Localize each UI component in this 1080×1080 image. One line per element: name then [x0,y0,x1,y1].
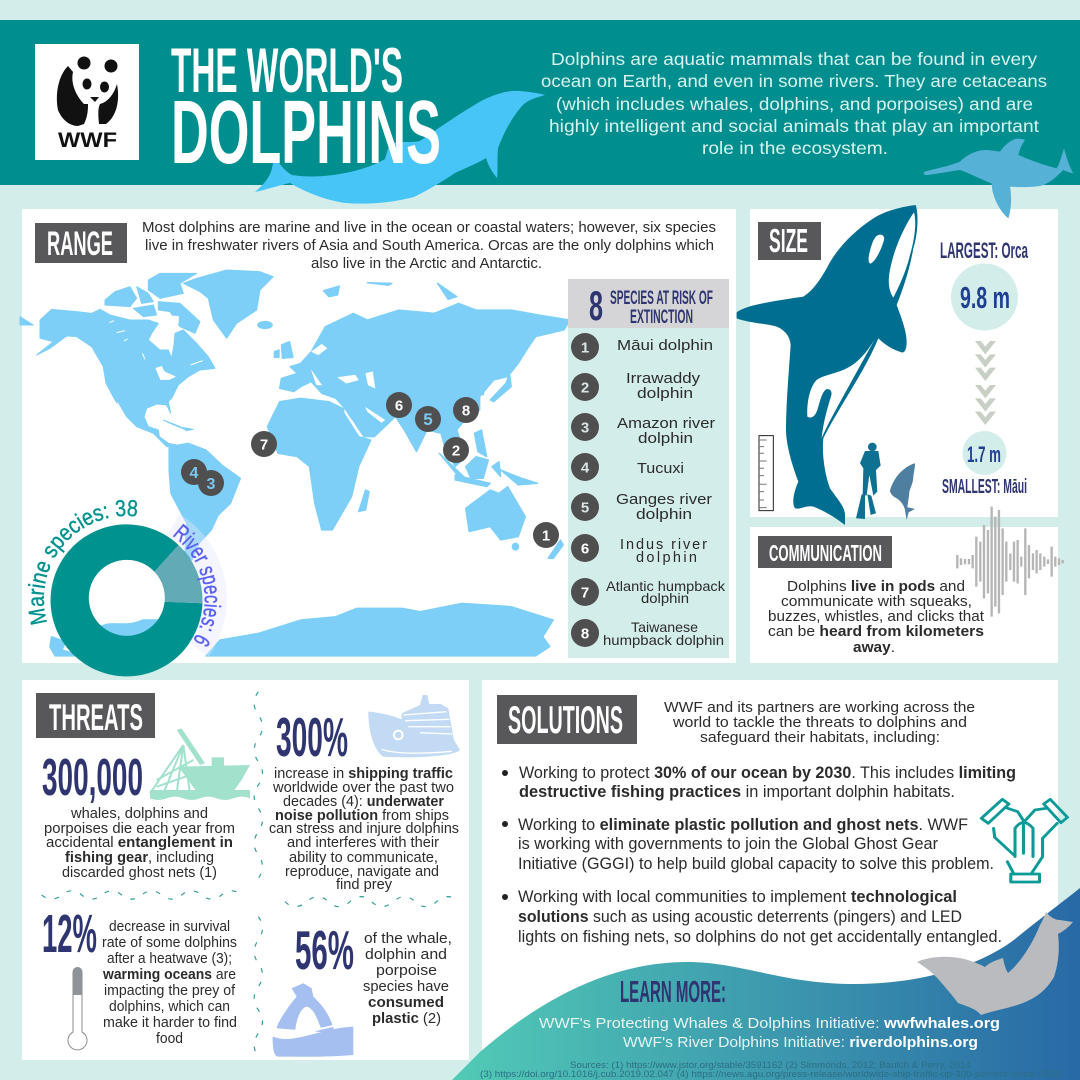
icon: blue dolphin in header [255,91,545,204]
donut chart: marine vs river species: Marine species: 38 [28,500,138,625]
threat text: warming: after a heatwave (3); [107,951,232,967]
bullet: ocean protection [502,764,1016,801]
threat text: plastic: of the whale, [364,931,452,947]
icon: joined hands [981,799,1067,882]
threat text: warming: impacting the prey of [104,983,236,999]
intro text: role in the ecosystem. [702,138,888,158]
text: LEARN MORE: [620,974,726,1009]
bullet: ocean protection: Working to protect 30% of our ocean by 2030. This includes limiting [519,764,1016,782]
panel: species at risk list: Taiwanese [631,619,698,635]
sources: (3) https://doi.org/10.1016/j.cub.2019.02.047 (4) https://news.agu.org/press-release/worldwide-ship-traffic-up-300-percent-since-1992/ [480,1069,1062,1080]
heading: threats [36,693,155,738]
threat text: shipping [269,766,459,893]
panel: species at risk list: Māui dolphin [617,338,713,354]
threat text: shipping: reproduce, navigate and [285,864,439,880]
panel: species at risk list: Tucuxi [637,461,684,477]
icon: thermometer [68,968,87,1050]
panel: species at risk list: EXTINCTION [630,306,693,328]
intro text: highly intelligent and social animals that play an important [549,116,1039,136]
intro text: ocean on Earth, and even in some rivers. They are cetaceans [541,71,1047,91]
icon: ruler [759,436,773,511]
range text: live in freshwater rivers of Asia and South America. Orcas are the only dolphins which [145,238,714,254]
logo: WWF panda: WWF [58,129,117,152]
learn more links: WWF's River Dolphins Initiative: riverdolphins.org [623,1034,978,1051]
range text [142,220,716,272]
learn more wave [452,888,1080,1080]
threat text: warming [102,919,237,1047]
threat text: shipping: decades (4): underwater [283,794,444,810]
stat: 300%: 300% [276,706,348,768]
icon: fishing boat [150,728,250,800]
threat text: warming: food [156,1031,183,1047]
title: THE WORLD'S [171,36,403,106]
title: DOLPHINS [171,83,441,183]
threat text: plastic: species have [363,979,449,995]
panel: communication [750,527,1058,663]
threat text: plastic: dolphin and [365,947,447,963]
threat text: entanglement [44,806,235,881]
communication text: away. [853,640,895,656]
panel: species at risk list: 8 [581,626,589,642]
threat text: plastic [363,931,452,1027]
panel: species at risk list: 1 [581,340,589,356]
panel: species at risk list: 8 [589,282,603,329]
panel: species at risk list: Indus river [620,537,707,553]
solutions intro: WWF and its partners are working across the [664,700,975,716]
world map [20,270,570,656]
heading: range [35,223,127,263]
communication text: communicate with squeaks, [781,594,972,610]
1.7 m circle: 1.7 m [967,442,1001,467]
threat text: plastic: porpoise [376,963,437,979]
threat text: warming: make it harder to find [103,1015,237,1031]
wavy dividers [42,692,458,1057]
stat: 12%: 12% [42,904,97,964]
panel: size [750,209,1058,517]
sources [480,1060,1062,1080]
donut chart: marine vs river species [28,500,226,676]
range text: also live in the Arctic and Antarctic. [311,256,542,272]
bullet: technological solutions: solutions such as using acoustic deterrents (pingers) and LED [518,908,962,926]
heading: communication [758,536,892,568]
map markers [181,392,559,548]
panel: species at risk list: dolphin [641,590,689,606]
threat text: entanglement: porpoises die each year from [44,821,235,837]
bullet: plastic and ghost nets [502,816,994,873]
panel: species at risk list: dolphin [638,431,693,447]
heading: size: SIZE [769,222,808,259]
header band [0,20,1080,185]
intro text [541,49,1047,158]
heading: solutions: SOLUTIONS [508,699,623,742]
1.7 m circle [962,431,1006,475]
9.8 m circle [951,264,1018,330]
heading: communication: COMMUNICATION [769,540,882,566]
stat: 300,000: 300,000 [42,749,143,807]
panel: species at risk list: 3 [581,420,589,436]
learn more links: WWF's Protecting Whales & Dolphins Initiative: wwfwhales.org [539,1015,1000,1032]
threat text: plastic: consumed [368,995,444,1011]
threat text: entanglement: whales, dolphins and [70,806,208,822]
9.8 m circle: 9.8 m [960,280,1010,315]
communication text: can be heard from kilometers [768,624,984,640]
panel: species at risk list: humpback dolphin [603,632,724,648]
communication text: buzzes, whistles, and clicks that [768,609,984,625]
threat text: shipping: noise pollution from ships [275,808,449,824]
panel: species at risk list: 7 [581,584,589,602]
map markers: 7 [260,436,268,454]
intro text: (which includes whales, dolphins, and porpoises) and are [556,94,1033,114]
communication text [768,579,984,656]
panel: species at risk list: 4 [581,460,590,476]
learn more links [539,1015,1000,1051]
panel: species at risk list: 2 [581,380,589,396]
donut chart: marine vs river species: River species: 6 [173,524,222,647]
panel: species at risk list: Amazon river [617,416,715,432]
panel: species at risk list: Irrawaddy [626,371,701,387]
heading: solutions [497,695,637,744]
panel: species at risk list: dolphin [636,507,692,523]
threat text: warming: dolphins, which can [109,999,230,1015]
icon: diver [856,443,881,519]
threat text: shipping: increase in shipping traffic [274,766,453,782]
sources: Sources: (1) https://www.jstor.org/stable/3591162 (2) Simmonds, 2012; Baulch & Perry, 2014 [570,1060,971,1071]
bullet: technological solutions: Working with local communities to implement technological [518,888,957,906]
icon: plastic bottle [273,983,353,1057]
panel: species at risk list: Ganges river [616,492,712,508]
threat text: shipping: worldwide over the past two [272,780,454,796]
threat text: warming: decrease in survival [109,919,230,935]
map markers: 8 [462,402,470,420]
icon: orca silhouette [737,205,918,525]
icon: sound wave [957,507,1063,617]
panel: solutions [482,680,1058,1060]
bullet: plastic and ghost nets: is working with governments to join the Global Ghost Gear [518,835,938,853]
heading: threats: THREATS [49,697,143,738]
threat text: warming: warming oceans are [102,967,236,983]
panel: range [22,209,736,663]
intro text: Dolphins are aquatic mammals that can be found in every [551,49,1037,69]
solutions intro [664,700,975,746]
solutions intro: safeguard their habitats, including: [700,730,940,746]
threat text: shipping: find prey [336,877,393,893]
map markers: 6 [395,398,403,414]
threat text: shipping: and interferes with their [287,835,439,851]
map markers: 2 [452,442,460,460]
range text: Most dolphins are marine and live in the ocean or coastal waters; however, six species [142,220,716,236]
panel: species at risk list: 6 [581,540,589,558]
bullet: technological solutions [502,888,1002,946]
panel: species at risk list: dolphin [636,550,697,566]
panel: species at risk list: 5 [581,500,589,516]
icon: ship [368,695,460,757]
icon: pale dolphin at header right [924,139,1073,218]
threat text: entanglement: fishing gear, including [65,850,214,866]
heading: range: RANGE [47,225,113,263]
title [171,36,441,183]
panel: species at risk list [568,279,729,658]
bullet: plastic and ghost nets: Working to eliminate plastic pollution and ghost nets. WWF [518,816,968,834]
icon: grey dolphin [917,912,1073,1015]
threat text: shipping: can stress and injure dolphins [269,821,459,837]
threat text: plastic: plastic (2) [372,1011,441,1027]
panel: threats [22,680,469,1060]
map markers: 1 [542,528,550,544]
map markers: 4 [190,465,199,482]
communication text: Dolphins live in pods and [787,579,965,595]
stat: 56%: 56% [295,919,354,981]
map markers: 5 [423,410,433,429]
panel: species at risk list: dolphin [637,386,693,402]
heading: size [758,222,821,260]
threat text: shipping: ability to communicate, [289,850,438,866]
chevron arrows [975,341,996,425]
panel: species at risk list: SPECIES AT RISK OF [610,287,713,309]
solutions intro: world to tackle the threats to dolphins and [672,715,967,731]
icon: small dolphin [890,463,915,520]
panel: species at risk list: Atlantic humpback [606,578,726,594]
logo: WWF panda [35,44,139,160]
threat text: entanglement: accidental entanglement in [46,835,233,851]
bullet: technological solutions: lights on fishing nets, so dolphins do not get accidentally entangled. [518,928,1002,946]
threat text: entanglement: discarded ghost nets (1) [62,865,217,881]
bullet: plastic and ghost nets: Initiative (GGGI) to help build global capacity to solve this problem. [518,855,994,873]
threat text: warming: rate of some dolphins [102,935,237,951]
map markers: 3 [207,476,216,493]
bullet: ocean protection: destructive fishing practices in important dolphin habitats. [519,783,955,801]
